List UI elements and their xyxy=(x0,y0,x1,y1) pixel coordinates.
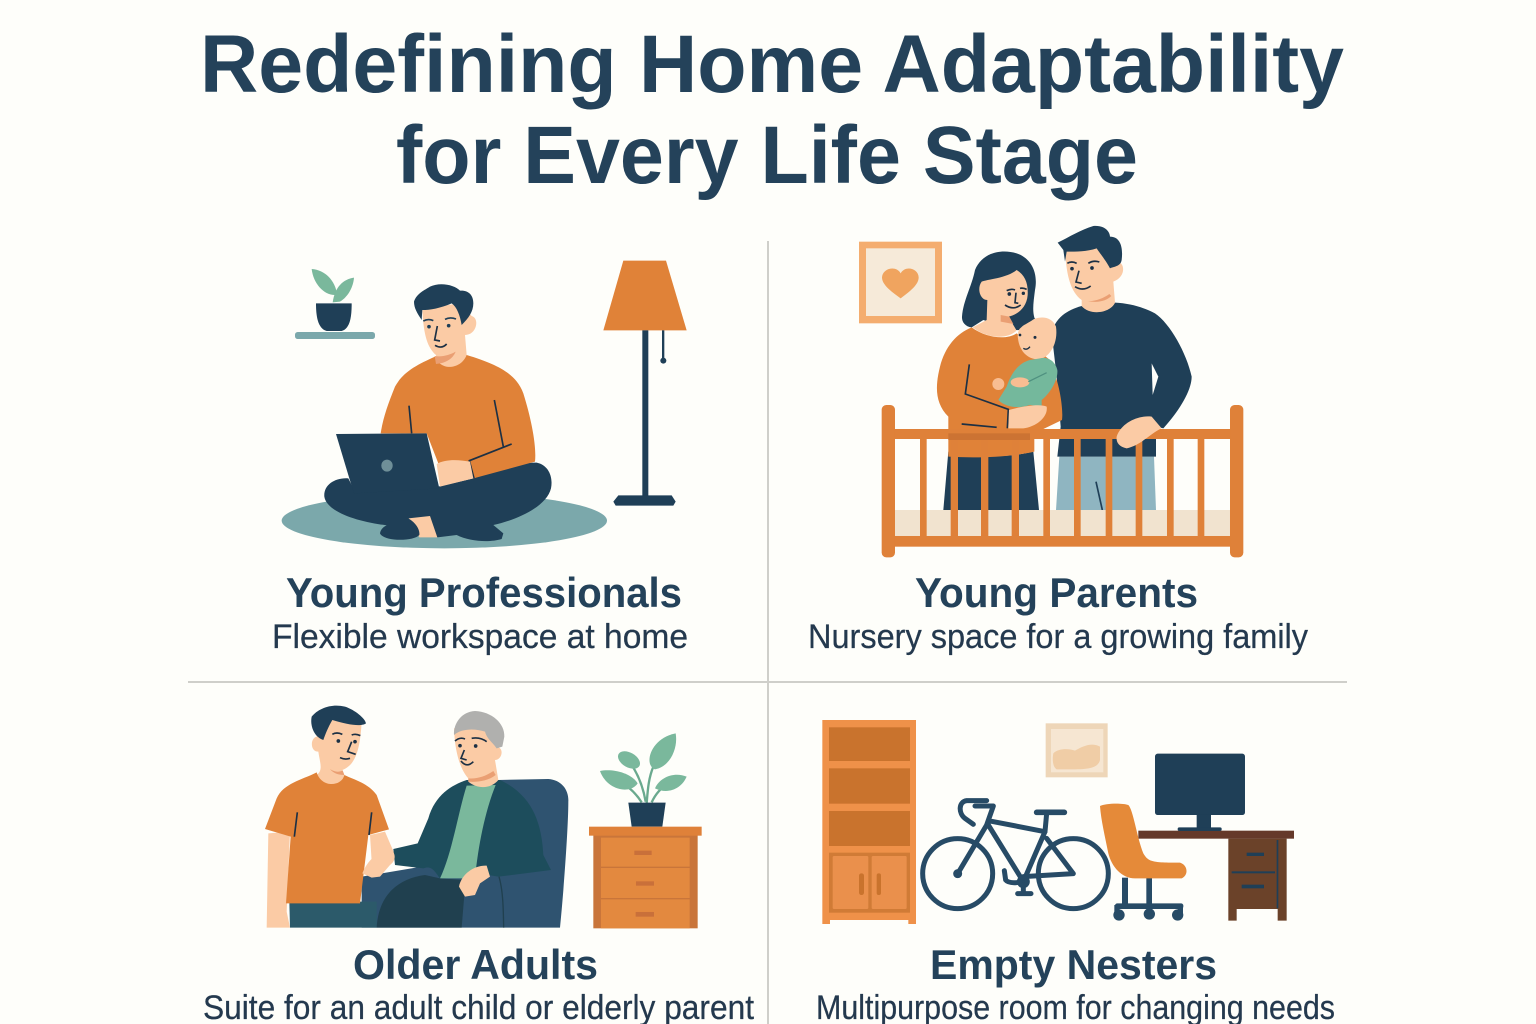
icon: bicycle xyxy=(923,801,1108,909)
subheading: Nursery space for a growing family xyxy=(808,618,1308,656)
heading: Older Adults xyxy=(353,941,598,988)
panel: empty nesters xyxy=(816,720,1335,1024)
title: Redefining Home Adaptability xyxy=(200,19,1344,110)
icon: older man xyxy=(362,711,551,928)
panel: older adults xyxy=(203,706,755,1024)
title xyxy=(200,19,1344,201)
icon: wall picture xyxy=(1046,723,1108,777)
icon: father xyxy=(1052,226,1192,510)
subheading: Flexible workspace at home xyxy=(272,618,688,656)
title: for Every Life Stage xyxy=(396,110,1138,201)
heading: Young Professionals xyxy=(286,569,682,616)
panel: young professionals xyxy=(272,261,688,656)
icon: baby xyxy=(992,317,1057,428)
icon: framed heart xyxy=(859,242,942,323)
icon: bookcase xyxy=(822,720,916,924)
illustration: family at crib xyxy=(859,226,1243,557)
icon: wall shelf with plant xyxy=(295,269,375,339)
panel: young parents xyxy=(808,226,1308,656)
icon: desk xyxy=(1138,831,1294,921)
heading: Young Parents xyxy=(915,569,1198,616)
icon: crib xyxy=(882,405,1243,557)
icon: armchair xyxy=(362,779,568,928)
icon: man xyxy=(324,284,552,541)
icon: mother xyxy=(937,251,1062,510)
icon: rug xyxy=(282,493,607,548)
icon: monitor xyxy=(1155,754,1245,831)
icon: office chair xyxy=(1100,804,1187,921)
icon: laptop xyxy=(336,433,439,493)
illustration: son with elderly parent xyxy=(265,706,702,928)
illustration: multipurpose room xyxy=(822,720,1294,924)
icon: side table with plant xyxy=(589,733,702,928)
icon: younger man xyxy=(265,706,395,928)
icon: floor lamp xyxy=(603,261,687,506)
heading: Empty Nesters xyxy=(930,941,1217,988)
illustration: man working on laptop xyxy=(282,261,687,548)
